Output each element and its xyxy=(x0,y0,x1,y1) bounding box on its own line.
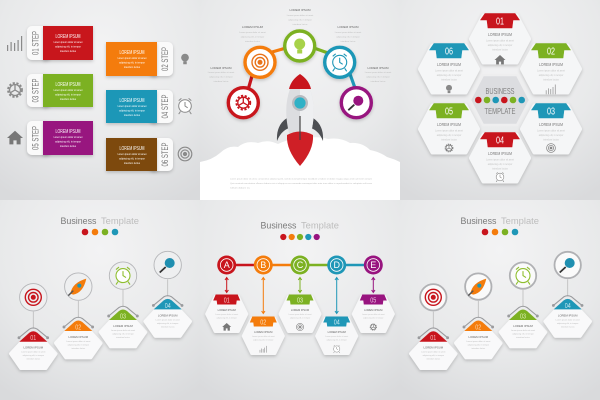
hexagon 05 xyxy=(420,104,478,152)
node C xyxy=(290,256,310,274)
node B xyxy=(254,256,273,274)
card: 05 step: 05 STEP xyxy=(30,126,40,150)
card: 03 step: adipiscing elit, in tempor xyxy=(55,94,81,96)
heading: Template xyxy=(301,220,339,232)
labels xyxy=(208,8,392,83)
step 03: Lorem ipsum dolor sit amet xyxy=(111,329,136,332)
connectors between circles xyxy=(248,48,355,90)
step 04: interdum luctus xyxy=(161,325,174,328)
labels: Lorem ipsum dolor sit amet xyxy=(208,71,235,74)
step 03: Lorem ipsum dolor sit amet xyxy=(511,329,536,332)
card: 02 step: LOREM IPSUM xyxy=(120,50,144,56)
step 02: adipiscing elit, in tempor xyxy=(468,344,489,346)
heading xyxy=(460,216,539,227)
step 02: interdum luctus xyxy=(472,347,485,350)
hexagon 03: adipiscing elit, in tempor xyxy=(539,134,564,137)
step 02 xyxy=(56,273,101,358)
labels: interdum luctus xyxy=(371,80,386,83)
card: 06 step: interdum luctus xyxy=(124,162,141,165)
card: 04 step: interdum luctus xyxy=(124,114,141,117)
step 01: 01 xyxy=(430,335,436,342)
card: 01 step: interdum luctus xyxy=(60,50,77,53)
node D xyxy=(327,256,346,274)
footer paragraph: Cillum dolore eu xyxy=(230,186,251,190)
color dots xyxy=(82,229,118,235)
card: 04 step xyxy=(106,90,173,123)
step 02: 02 xyxy=(75,324,81,332)
icon: gear xyxy=(8,83,22,97)
icon: bar chart xyxy=(7,36,22,51)
hexagon 04: 04 xyxy=(496,136,504,146)
hexagon 04: Lorem ipsum dolor sit amet xyxy=(325,335,349,338)
step 01: interdum luctus xyxy=(427,358,440,361)
hexagon 03: adipiscing elit, in tempor xyxy=(290,316,311,320)
step 03 xyxy=(500,262,546,347)
card: 04 step: adipiscing elit, in tempor xyxy=(119,110,145,112)
icon: light bulb xyxy=(181,54,189,64)
node E xyxy=(364,256,383,274)
hexagon 02: LOREM IPSUM xyxy=(254,330,272,334)
panel: ascending steps left xyxy=(10,216,190,368)
heading: Template xyxy=(501,216,539,227)
hexagon 01: LOREM IPSUM xyxy=(218,308,236,312)
hexagon 02 xyxy=(522,44,580,94)
hexagon 01: Lorem ipsum dolor sit amet xyxy=(215,313,239,316)
hexagon 03: LOREM IPSUM xyxy=(291,308,309,312)
labels: Lorem ipsum dolor sit amet xyxy=(335,31,362,34)
hexagon 02: 02 xyxy=(260,320,266,326)
step 02 xyxy=(456,273,501,358)
node A: A xyxy=(224,260,230,270)
footer paragraph xyxy=(230,178,373,190)
step 02: LOREM IPSUM xyxy=(469,335,489,339)
step 01: Lorem ipsum dolor sit amet xyxy=(421,351,446,354)
hexagon 04: adipiscing elit, in tempor xyxy=(327,338,347,342)
card: 03 step xyxy=(27,74,93,107)
step 04: 04 xyxy=(165,303,171,310)
step 01: adipiscing elit, in tempor xyxy=(423,354,444,357)
hexagon 04: Lorem ipsum dolor sit amet xyxy=(486,158,514,162)
card: 02 step xyxy=(106,42,173,76)
hexagon 05: 05 xyxy=(445,106,453,118)
step 04: interdum luctus xyxy=(561,325,574,328)
hexagon 05: adipiscing elit, in tempor xyxy=(437,134,462,137)
node D: D xyxy=(333,260,340,270)
hexagon 04 xyxy=(471,132,529,182)
card: 05 step: interdum luctus xyxy=(60,145,77,148)
labels: interdum luctus xyxy=(214,80,229,83)
node B: B xyxy=(260,260,266,270)
labels: adipiscing elit, in tempor xyxy=(336,36,360,38)
hexagon 06: interdum luctus xyxy=(441,78,458,82)
hexagon 04: adipiscing elit, in tempor xyxy=(488,163,513,166)
labels: adipiscing elit, in tempor xyxy=(241,36,265,38)
step 04 xyxy=(545,252,590,336)
hexagon 02: interdum luctus xyxy=(543,78,560,82)
card: 03 step: interdum luctus xyxy=(60,98,77,101)
center hexagon xyxy=(470,75,530,125)
heading: Business xyxy=(460,216,497,227)
hexagon 03: interdum luctus xyxy=(543,138,560,142)
hexagon 05: 05 xyxy=(370,298,376,304)
hexagon 05 xyxy=(353,294,393,332)
hexagon 03 xyxy=(522,104,580,152)
card: 06 step: Lorem ipsum dolor sit amet xyxy=(118,153,147,156)
step 02: LOREM IPSUM xyxy=(69,335,89,339)
hexagon 04: interdum luctus xyxy=(492,168,509,170)
card: 01 step: Lorem ipsum dolor sit amet xyxy=(54,41,83,44)
labels: Lorem ipsum dolor sit amet xyxy=(365,71,392,74)
hexagon 02: Lorem ipsum dolor sit amet xyxy=(252,335,275,338)
hexagon 03: 03 xyxy=(297,298,303,304)
step 01 xyxy=(10,284,56,368)
step 03: interdum luctus xyxy=(116,336,130,339)
hexagon 01: interdum luctus xyxy=(492,48,509,52)
footer paragraph: Lorem ipsum dolor sit amet, consectetur adipiscing elit, sed do eiusmod tempor incididunt ut labore et dolore magna aliqua enim ad minim veniam xyxy=(230,178,372,180)
hexagon 01 xyxy=(471,14,529,64)
node: clock xyxy=(325,47,355,77)
hexagon 05: interdum luctus xyxy=(441,138,458,142)
hexagon 02: 02 xyxy=(547,46,555,58)
node: gear xyxy=(228,88,258,118)
step 04: Lorem ipsum dolor sit amet xyxy=(556,318,580,321)
step 04 xyxy=(145,251,190,336)
card: 04 step: LOREM IPSUM xyxy=(120,98,144,104)
hexagon 02 xyxy=(243,316,283,354)
hexagon 03: Lorem ipsum dolor sit amet xyxy=(537,130,565,132)
center hexagon: BUSINESS xyxy=(486,86,515,96)
hexagon 04 xyxy=(317,316,357,354)
hexagon 03: 03 xyxy=(547,106,555,118)
step 01: LOREM IPSUM xyxy=(24,346,44,350)
card: 03 step: Lorem ipsum dolor sit amet xyxy=(54,89,83,92)
step 02: interdum luctus xyxy=(72,347,85,350)
hexagon 02: LOREM IPSUM xyxy=(539,62,563,67)
labels: adipiscing elit, in tempor xyxy=(366,76,390,78)
step 02: Lorem ipsum dolor sit amet xyxy=(66,340,91,343)
labels: LOREM IPSUM xyxy=(242,25,263,29)
hexagon 03 xyxy=(280,294,320,332)
hexagon 06: 06 xyxy=(445,46,453,58)
card: 02 step: 02 STEP xyxy=(160,47,170,71)
hexagon 01: LOREM IPSUM xyxy=(488,32,512,37)
card: 02 step: interdum luctus xyxy=(124,66,141,69)
color dots xyxy=(280,234,320,240)
hexagon 06: adipiscing elit, in tempor xyxy=(437,74,462,77)
step 03: adipiscing elit, in tempor xyxy=(512,332,534,336)
hexagon 04: LOREM IPSUM xyxy=(488,151,512,156)
hexagon 04: LOREM IPSUM xyxy=(328,330,346,334)
rocket xyxy=(277,74,323,166)
card: 06 step xyxy=(106,138,173,171)
step 03: adipiscing elit, in tempor xyxy=(112,332,134,336)
heading: Template xyxy=(101,216,139,227)
labels: adipiscing elit, in tempor xyxy=(209,76,233,78)
node E: E xyxy=(370,260,376,270)
step 01: adipiscing elit, in tempor xyxy=(23,354,44,357)
card: 06 step: adipiscing elit, in tempor xyxy=(119,158,145,160)
step 04: Lorem ipsum dolor sit amet xyxy=(156,318,180,321)
step 01: 01 xyxy=(30,335,36,342)
labels: LOREM IPSUM xyxy=(289,8,311,12)
hexagon 03: Lorem ipsum dolor sit amet xyxy=(289,313,312,316)
icon: target xyxy=(178,147,192,161)
hexagon 03: LOREM IPSUM xyxy=(539,122,563,127)
labels: Lorem ipsum dolor sit amet xyxy=(239,31,266,34)
panel: six step cards xyxy=(7,26,192,171)
heading: Business xyxy=(260,220,297,232)
hexagon 06: Lorem ipsum dolor sit amet xyxy=(435,70,463,72)
step 02: 02 xyxy=(475,324,481,332)
hexagon 02: adipiscing elit, in tempor xyxy=(253,338,274,342)
step 03 xyxy=(100,262,146,347)
labels: adipiscing elit, in tempor xyxy=(288,18,312,22)
card: 05 step xyxy=(27,121,93,155)
hexagon 05: LOREM IPSUM xyxy=(437,122,461,127)
step 03: LOREM IPSUM xyxy=(513,324,533,328)
panel: ascending steps right xyxy=(410,216,590,368)
card: 06 step: 06 STEP xyxy=(160,142,170,166)
hexagon 05: Lorem ipsum dolor sit amet xyxy=(362,313,385,316)
card: 01 step: 01 STEP xyxy=(30,31,40,55)
step 01: LOREM IPSUM xyxy=(424,346,444,350)
card: 05 step: LOREM IPSUM xyxy=(56,129,80,135)
card: 04 step: Lorem ipsum dolor sit amet xyxy=(118,105,147,108)
card: 04 step: 04 STEP xyxy=(160,94,170,118)
panel: timeline A to E xyxy=(207,220,393,354)
hexagon 01: adipiscing elit, in tempor xyxy=(217,316,237,320)
cloud xyxy=(200,137,400,200)
hexagon 06 xyxy=(420,44,478,93)
center hexagon: TEMPLATE xyxy=(484,106,516,116)
card: 03 step: 03 STEP xyxy=(30,78,40,102)
card: 01 step xyxy=(27,26,93,60)
labels: Lorem ipsum dolor sit amet xyxy=(287,14,314,17)
step 03: LOREM IPSUM xyxy=(113,324,133,328)
panel: rocket launch xyxy=(200,8,400,200)
heading xyxy=(260,220,339,232)
card: 02 step: adipiscing elit, in tempor xyxy=(119,62,145,64)
card: 05 step: Lorem ipsum dolor sit amet xyxy=(54,136,83,139)
hexagon 01: 01 xyxy=(224,298,230,304)
hexagon 01: Lorem ipsum dolor sit amet xyxy=(486,40,514,42)
labels: LOREM IPSUM xyxy=(367,66,389,70)
hexagon 05: LOREM IPSUM xyxy=(364,308,382,312)
hexagon 05: adipiscing elit, in tempor xyxy=(363,316,384,320)
panel: hexagon cycle xyxy=(420,14,580,182)
node: target xyxy=(245,47,275,77)
arrows xyxy=(225,278,375,314)
node A xyxy=(217,256,236,274)
step 04: LOREM IPSUM xyxy=(558,313,578,317)
footer paragraph: Quis nostrud exercitation ullamco laboris nisi ut aliquip ex ea commodo consequat duis aute irure dolor in reprehenderit in voluptate velit esse xyxy=(230,182,373,185)
hexagon 06: LOREM IPSUM xyxy=(437,62,461,67)
labels: interdum luctus xyxy=(293,23,308,26)
card: 05 step: adipiscing elit, in tempor xyxy=(55,140,81,144)
heading xyxy=(60,216,139,227)
hexagon 02: adipiscing elit, in tempor xyxy=(539,74,564,77)
card: 06 step: LOREM IPSUM xyxy=(120,146,144,152)
hexagon 04: 04 xyxy=(334,320,340,326)
card: 01 step: adipiscing elit, in tempor xyxy=(55,46,81,48)
step 03: 03 xyxy=(120,314,126,320)
node C: C xyxy=(297,260,304,270)
card: 03 step: LOREM IPSUM xyxy=(56,82,80,88)
hexagon 02: Lorem ipsum dolor sit amet xyxy=(537,70,565,72)
hexagon 05: Lorem ipsum dolor sit amet xyxy=(435,130,463,132)
icon: alarm clock xyxy=(179,98,191,114)
step 03: 03 xyxy=(520,314,526,320)
card: 02 step: Lorem ipsum dolor sit amet xyxy=(118,57,147,60)
step 02: adipiscing elit, in tempor xyxy=(68,344,89,346)
node: magnifier xyxy=(341,88,371,118)
icon: house xyxy=(7,131,23,144)
step 02: Lorem ipsum dolor sit amet xyxy=(466,340,491,343)
connector line xyxy=(227,264,373,266)
hexagon 01: 01 xyxy=(496,16,504,28)
card: 01 step: LOREM IPSUM xyxy=(56,34,80,40)
labels: interdum luctus xyxy=(245,40,261,43)
step 01: Lorem ipsum dolor sit amet xyxy=(21,351,46,354)
step 03: interdum luctus xyxy=(516,336,530,339)
hexagon 01: adipiscing elit, in tempor xyxy=(488,44,513,47)
step 04: adipiscing elit, in tempor xyxy=(557,322,579,325)
step 04: LOREM IPSUM xyxy=(158,313,178,317)
step 04: adipiscing elit, in tempor xyxy=(157,322,179,325)
color dots xyxy=(482,229,518,235)
labels: interdum luctus xyxy=(341,40,356,43)
hexagon 01 xyxy=(207,294,247,332)
step 04: 04 xyxy=(565,303,571,310)
step 01: interdum luctus xyxy=(27,358,40,361)
step 01 xyxy=(410,284,456,368)
labels: LOREM IPSUM xyxy=(337,25,359,29)
node: light bulb xyxy=(285,31,315,61)
heading: Business xyxy=(60,216,97,227)
labels: LOREM IPSUM xyxy=(210,66,232,70)
